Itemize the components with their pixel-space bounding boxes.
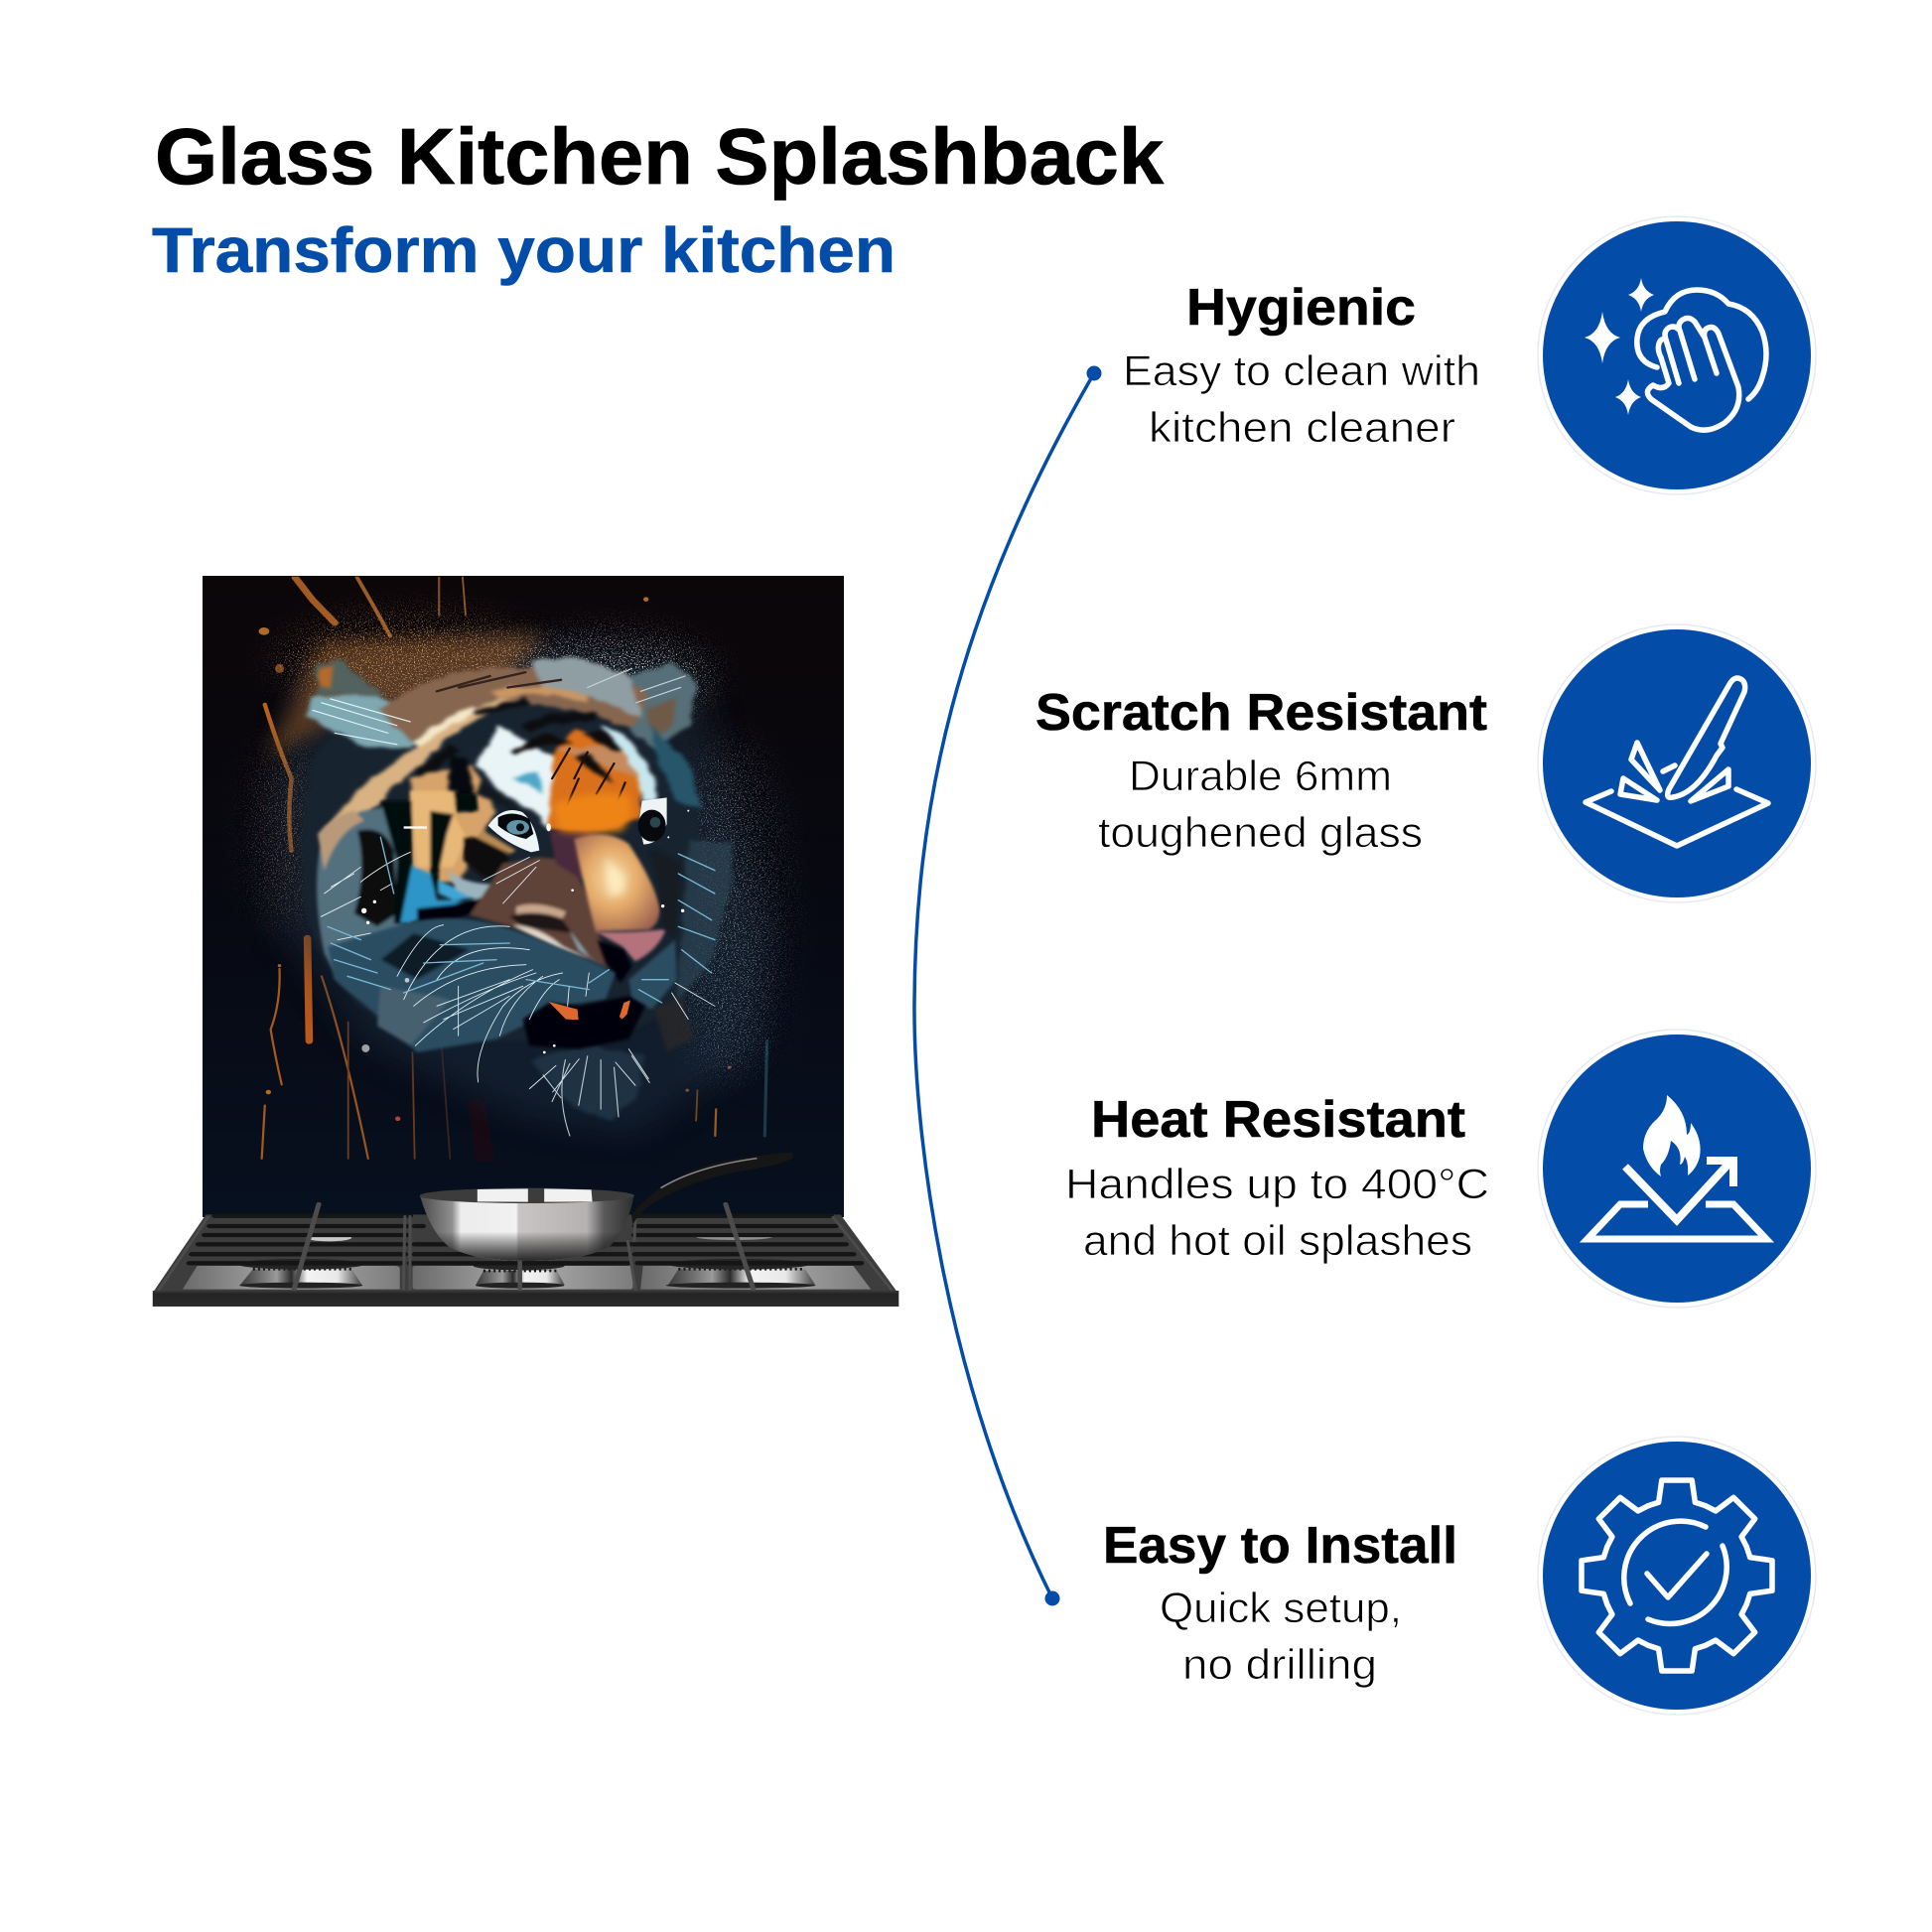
description: Handles up to 400°C <box>1065 1161 1489 1208</box>
crown stripes <box>415 697 597 782</box>
description <box>1160 1585 1402 1689</box>
icon: flame and heat deflection <box>1538 1030 1816 1308</box>
feature: hygienic <box>1123 279 1480 452</box>
white specks <box>361 810 689 1053</box>
description: toughened glass <box>1098 809 1423 857</box>
heading: Hygienic <box>1186 279 1416 337</box>
icon: knife scratching glass <box>1538 624 1816 902</box>
steel panels <box>183 1266 871 1290</box>
muzzle highlights <box>606 857 625 897</box>
description: Durable 6mm <box>1129 753 1392 800</box>
description: and hot oil splashes <box>1083 1217 1472 1265</box>
whiskers <box>321 852 715 1092</box>
white forehead <box>477 726 552 828</box>
orange forehead bright <box>553 793 632 834</box>
fangs <box>549 1000 630 1020</box>
left eye <box>488 810 539 852</box>
heading: Heat Resistant <box>1091 1091 1465 1149</box>
pan body <box>420 1196 633 1261</box>
mouth <box>523 996 645 1049</box>
description <box>1065 1161 1489 1265</box>
right mane <box>676 840 734 999</box>
panel: splashback tiger artwork <box>203 576 844 1217</box>
title: Glass Kitchen Splashback <box>155 112 1165 201</box>
splatter dots <box>259 597 731 1121</box>
paint drips and splatter <box>262 577 767 1162</box>
icon: hand wiping <box>1538 216 1816 494</box>
subtitle: Transform your kitchen <box>152 214 896 286</box>
description <box>1098 753 1423 857</box>
heading: Easy to Install <box>1103 1517 1457 1575</box>
description: Easy to clean with <box>1123 347 1480 395</box>
grate bars <box>190 1216 861 1263</box>
connector curve <box>914 373 1094 1598</box>
tiger central face detail <box>317 791 715 1092</box>
connector dot top <box>1086 365 1102 381</box>
speckled dust <box>277 616 543 707</box>
description: Quick setup, <box>1160 1585 1402 1632</box>
left face orange <box>410 763 494 889</box>
description: no drilling <box>1182 1641 1377 1689</box>
fur and cheek masses <box>317 791 622 1000</box>
description <box>1123 347 1480 452</box>
stove with pan <box>153 1153 898 1307</box>
whisker pads <box>328 918 677 1052</box>
head base <box>297 702 702 1004</box>
cream arc <box>326 699 525 832</box>
front edge <box>153 1291 898 1307</box>
muzzle <box>574 834 660 931</box>
right eye <box>638 797 667 845</box>
beard <box>530 1044 645 1121</box>
head glow and dust halo <box>273 642 764 1136</box>
connector dot bottom <box>1044 1590 1060 1606</box>
pan rim <box>420 1188 634 1203</box>
feature: scratch resistant <box>1035 684 1487 857</box>
upper fine fur strokes <box>313 668 685 809</box>
orange forehead <box>550 730 643 832</box>
pan handle <box>631 1153 793 1224</box>
nose <box>596 929 666 961</box>
crown dust band <box>379 667 649 745</box>
beard strokes <box>543 1056 649 1136</box>
burners <box>237 1234 816 1289</box>
hob surface <box>153 1214 897 1292</box>
icon: gear with check <box>1538 1437 1816 1715</box>
tiger face painted shapes <box>302 658 734 1121</box>
dark right face <box>648 851 682 936</box>
right white band <box>601 726 658 803</box>
feature: easy to install <box>1103 1517 1457 1689</box>
heading: Scratch Resistant <box>1035 684 1487 742</box>
ears <box>305 695 415 749</box>
nostril and lip <box>598 940 632 983</box>
description: kitchen cleaner <box>1149 404 1455 452</box>
feature: heat resistant <box>1065 1091 1489 1265</box>
